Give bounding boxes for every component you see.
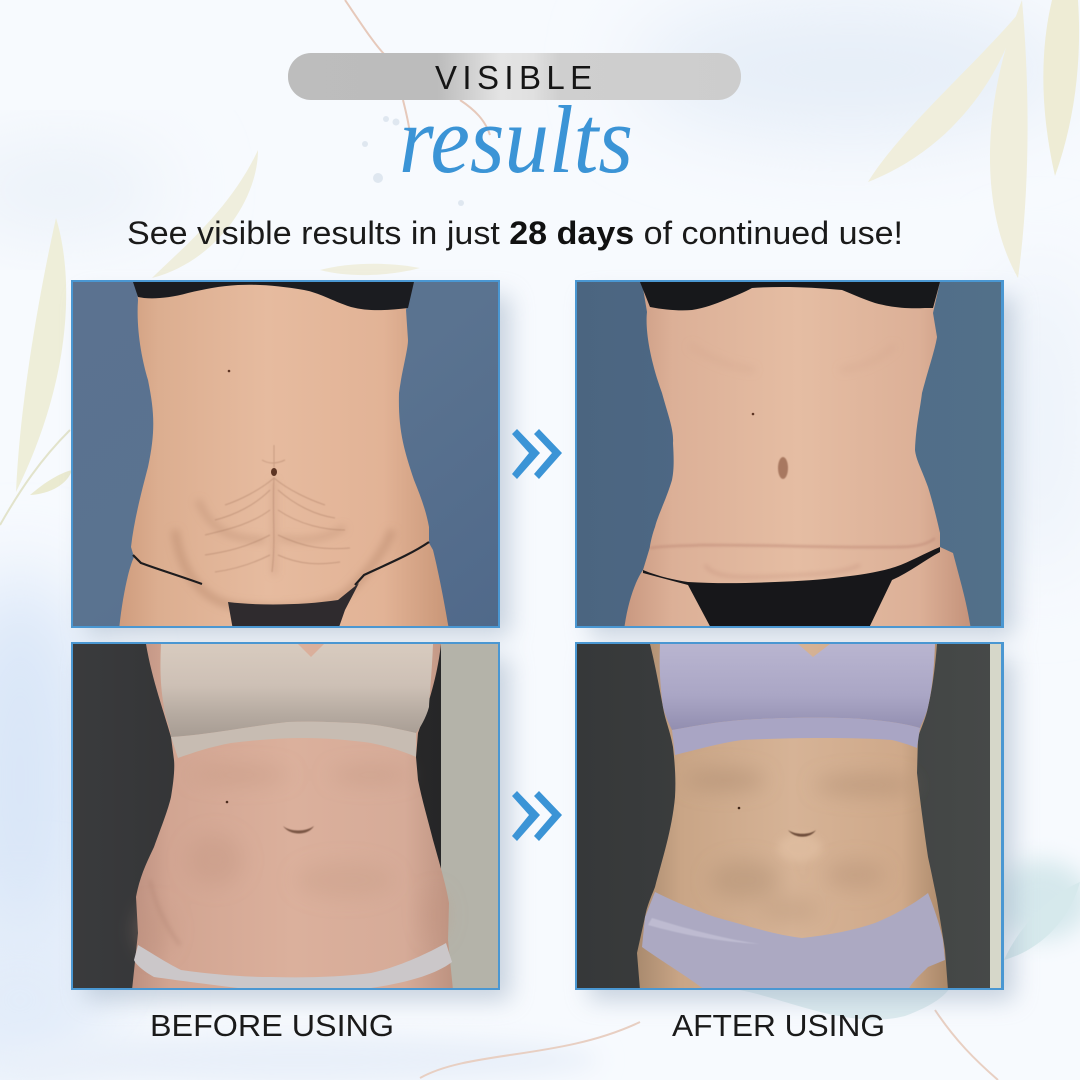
mole	[228, 370, 230, 372]
abdomen shading	[130, 908, 138, 950]
bra band	[171, 722, 416, 758]
torso	[624, 282, 971, 630]
underwear patch	[228, 583, 359, 630]
underwear	[642, 892, 945, 990]
crease	[705, 565, 860, 577]
mole	[226, 801, 228, 803]
belly highlight	[783, 839, 818, 857]
panel: bottom after photo	[575, 642, 1004, 990]
bra band	[640, 282, 940, 310]
bra	[660, 644, 935, 730]
wall light	[441, 644, 498, 988]
hip contour	[150, 880, 180, 945]
navel	[788, 830, 816, 837]
wall	[73, 644, 443, 988]
pill heading: VISIBLE	[288, 53, 741, 100]
panel shadows	[85, 296, 1014, 1000]
wall	[577, 282, 1001, 626]
panel: top before photo	[71, 280, 500, 630]
navel	[778, 457, 788, 479]
panel: bottom before photo	[71, 642, 500, 990]
arrow: top double chevron	[512, 429, 562, 479]
underwear highlight	[648, 918, 760, 944]
navel	[271, 468, 277, 476]
mole	[752, 413, 754, 415]
pill heading: VISIBLE: VISIBLE	[435, 59, 598, 96]
panel: top after photo	[575, 280, 1004, 630]
wall light strip	[990, 644, 1001, 988]
rib shading	[690, 345, 895, 370]
navel	[283, 826, 314, 834]
bra	[160, 644, 433, 737]
wall	[73, 282, 498, 626]
label: after using: AFTER USING	[672, 1008, 885, 1043]
underwear	[134, 943, 452, 988]
script heading: results: results	[399, 86, 633, 193]
subtitle: See visible results in just 28 days of continued use!	[127, 215, 903, 251]
underwear strings	[133, 542, 429, 585]
underwear	[643, 547, 940, 630]
mole	[738, 807, 740, 809]
torso	[119, 282, 449, 630]
skin wrinkles	[205, 445, 350, 572]
bra band	[133, 282, 414, 310]
wall	[577, 644, 993, 988]
abdomen shading	[698, 770, 898, 916]
scar line	[650, 538, 935, 548]
arrow: bottom double chevron	[512, 791, 562, 841]
lower belly shading	[175, 480, 392, 609]
label: before using: BEFORE USING	[150, 1008, 394, 1043]
torso and chest	[637, 644, 948, 990]
bra band	[672, 718, 920, 755]
torso and chest	[132, 644, 453, 990]
